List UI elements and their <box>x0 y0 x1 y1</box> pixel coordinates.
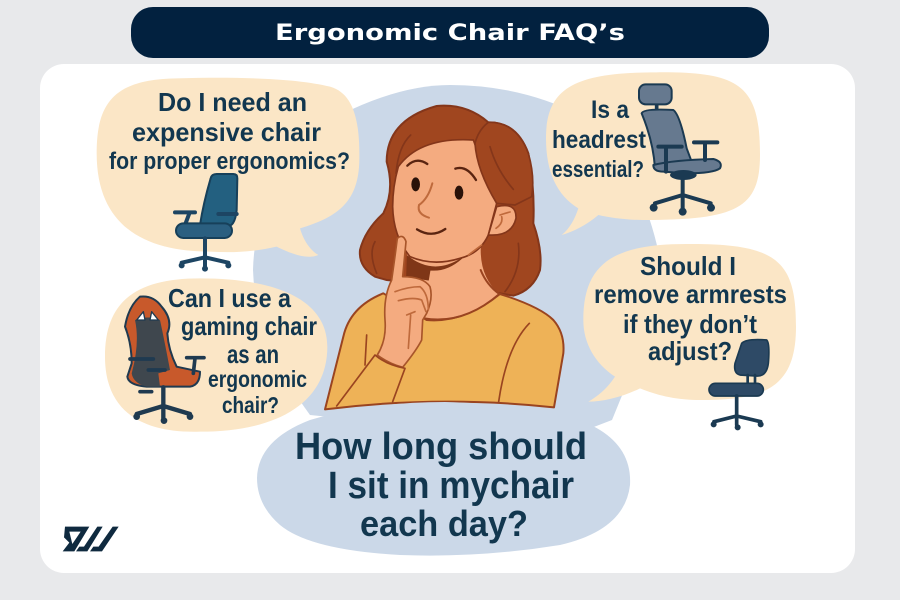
question bubble: how long to sit <box>257 402 630 556</box>
speech bubble: gaming chair: ergonomic <box>208 366 307 392</box>
icon: armless chair <box>709 340 769 430</box>
speech bubble: expensive chair <box>97 78 359 272</box>
eyes <box>411 177 420 191</box>
face <box>393 140 497 262</box>
speech bubble: gaming chair: chair? <box>222 392 279 418</box>
speech bubble: gaming chair: gaming chair <box>181 311 317 341</box>
sleeve lines <box>337 323 529 406</box>
speech bubble: headrest: essential? <box>552 156 644 182</box>
white panel <box>40 64 855 573</box>
woman thinking <box>325 106 564 409</box>
icon: grey chair with headrest <box>639 84 721 216</box>
speech bubble: armrests: Should I <box>640 251 736 281</box>
speech bubble: headrest <box>546 72 760 235</box>
speech bubble: gaming chair: as an <box>227 339 279 369</box>
nose <box>419 183 432 218</box>
speech bubble: armrests: adjust? <box>648 336 732 366</box>
title banner <box>131 7 769 58</box>
speech bubble: gaming chair <box>105 278 327 432</box>
title banner: Ergonomic Chair FAQ’s <box>275 21 625 46</box>
chin shadow <box>407 256 462 280</box>
speech bubble: gaming chair: Can I use a <box>168 283 291 313</box>
speech bubble: expensive chair: for proper ergonomics? <box>109 148 350 175</box>
speech bubble: expensive chair: Do I need an <box>158 87 307 117</box>
large blue thought bubble <box>253 85 665 440</box>
speech bubble: armrests <box>583 244 796 430</box>
icon: gaming chair <box>125 296 204 424</box>
speech bubble: headrest: headrest <box>552 126 647 154</box>
logo <box>63 527 119 551</box>
speech bubble: armrests: if they don’t <box>623 309 757 339</box>
hand <box>377 236 431 367</box>
speech bubble: armrests: remove armrests <box>594 279 787 309</box>
front hair lock <box>475 122 533 205</box>
question bubble: how long to sit: How long should <box>295 426 587 468</box>
icon: blue office chair <box>175 174 237 272</box>
ear <box>488 206 516 235</box>
speech bubble: headrest: Is a <box>591 96 630 124</box>
eyebrows <box>407 161 476 180</box>
question bubble: how long to sit: each day? <box>360 503 528 544</box>
hair <box>360 106 541 296</box>
neck <box>407 240 499 319</box>
question bubble: how long to sit: I sit in mychair <box>328 465 574 507</box>
speech bubble: expensive chair: expensive chair <box>132 117 321 147</box>
mouth <box>417 229 445 234</box>
sweater <box>325 293 564 409</box>
